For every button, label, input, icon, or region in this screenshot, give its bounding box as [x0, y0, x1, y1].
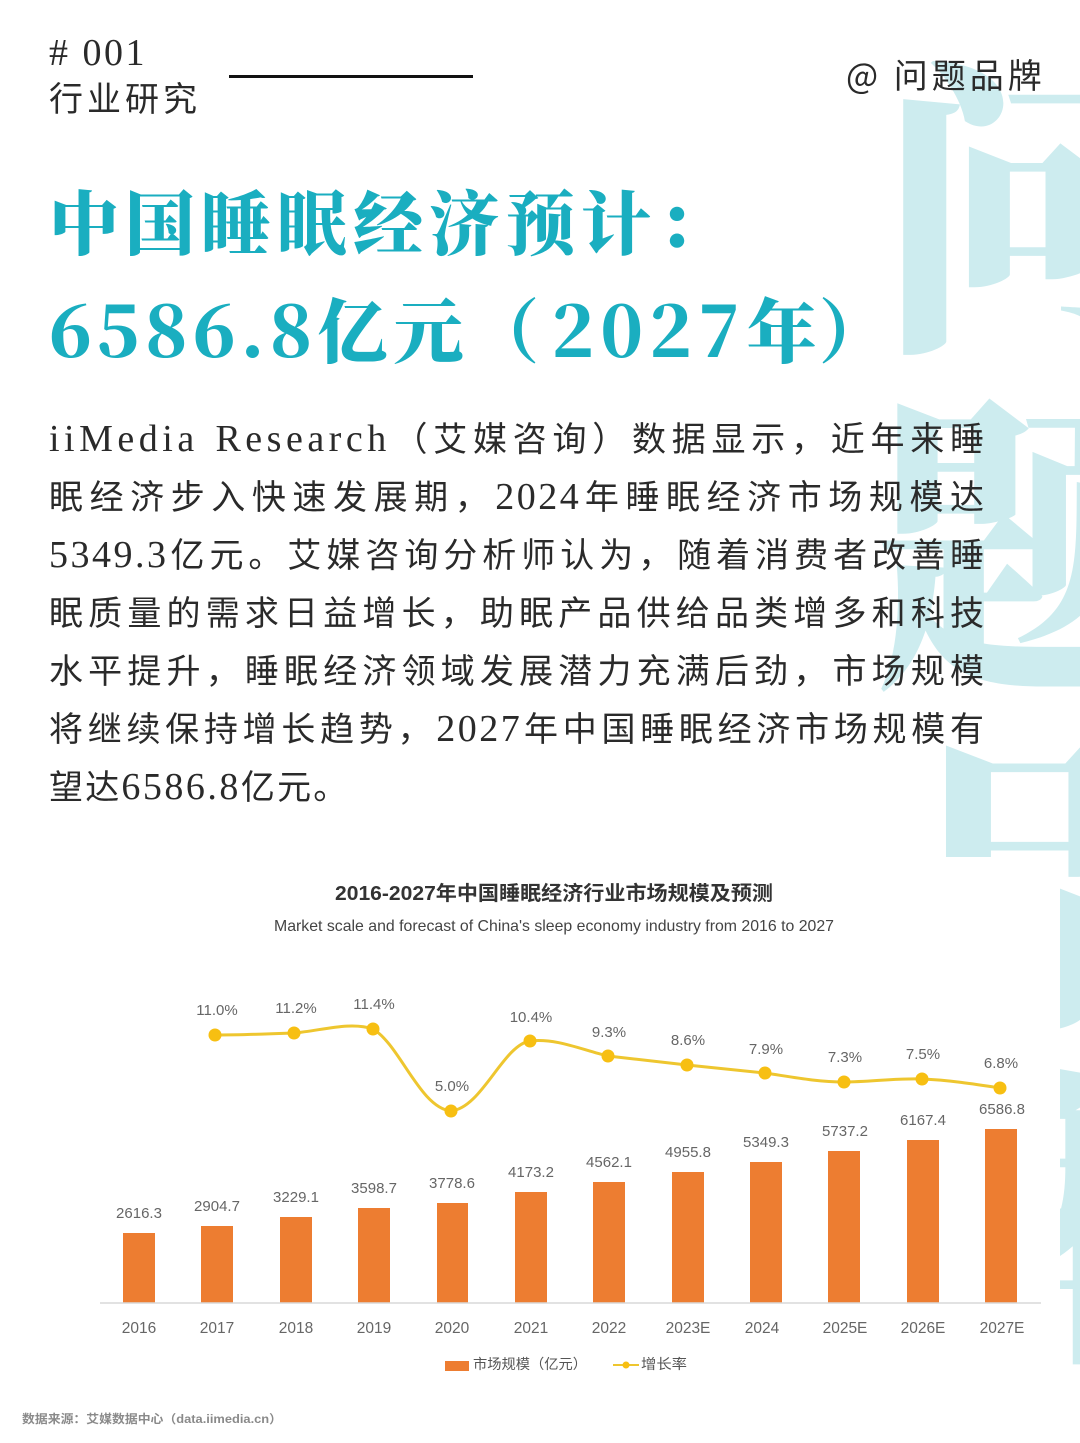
header rule: [229, 75, 473, 78]
bar value labels: 5349.3: [743, 1134, 789, 1151]
body paragraph: 眠经济步入快速发展期，2024年睡眠经济市场规模达: [49, 476, 987, 518]
body paragraph: 水平提升，睡眠经济领域发展潜力充满后劲，市场规模: [49, 654, 987, 691]
chart title: 2016-2027年中国睡眠经济行业市场规模及预测: [335, 881, 773, 905]
legend: [445, 1356, 687, 1372]
chart panel: [22, 881, 1041, 1426]
growth rate labels: 11.0%: [196, 1002, 238, 1019]
title: [49, 169, 895, 378]
category axis labels: 2025E: [823, 1320, 867, 1337]
growth rate labels: 7.5%: [906, 1046, 940, 1063]
bar value labels: 3229.1: [273, 1189, 319, 1206]
growth rate labels: 11.4%: [353, 996, 395, 1013]
bar chart: market size: [123, 1129, 1017, 1303]
brand tag: @ 问题品牌: [846, 49, 1046, 98]
growth rate labels: 5.0%: [435, 1078, 469, 1095]
category axis labels: 2017: [200, 1320, 234, 1337]
growth rate labels: 7.3%: [828, 1049, 862, 1066]
category axis labels: 2018: [279, 1320, 313, 1337]
bar value labels: 3598.7: [351, 1180, 397, 1197]
body paragraph: 5349.3亿元。艾媒咨询分析师认为，随着消费者改善睡: [49, 534, 987, 576]
title: 6586.8亿元（2027年）: [49, 277, 895, 378]
bar value labels: 4173.2: [508, 1164, 554, 1181]
growth rate labels: 7.9%: [749, 1041, 783, 1058]
bar value labels: 6167.4: [900, 1112, 946, 1129]
issue number and category: [49, 32, 201, 121]
issue number and category: 行业研究: [49, 72, 201, 121]
category axis labels: 2023E: [666, 1320, 710, 1337]
growth rate line: [208, 1022, 1006, 1118]
chart white backing: [0, 857, 1060, 1372]
title: 中国睡眠经济预计：: [49, 169, 733, 270]
bar value labels: 4955.8: [665, 1144, 711, 1161]
bar value labels: 2904.7: [194, 1198, 240, 1215]
category axis labels: 2019: [357, 1320, 391, 1337]
category axis labels: 2027E: [980, 1320, 1024, 1337]
bar value labels: 3778.6: [429, 1175, 475, 1192]
growth rate labels: 8.6%: [671, 1032, 705, 1049]
bar value labels: 4562.1: [586, 1154, 632, 1171]
body paragraph: [49, 418, 987, 808]
legend: 增长率: [641, 1356, 687, 1372]
category axis labels: 2022: [592, 1320, 626, 1337]
axis line: [100, 1302, 1041, 1304]
body paragraph: 眠质量的需求日益增长，助眠产品供给品类增多和科技: [49, 596, 987, 633]
category axis labels: 2016: [122, 1320, 156, 1337]
source note: 数据来源：艾媒数据中心（data.iimedia.cn）: [22, 1411, 282, 1426]
body paragraph: iiMedia Research（艾媒咨询）数据显示，近年来睡: [49, 418, 987, 460]
bar value labels: 5737.2: [822, 1123, 868, 1140]
category axis labels: [122, 1320, 1024, 1337]
chart title: Market scale and forecast of China's sleep economy industry from 2016 to 2027: [274, 918, 834, 935]
category axis labels: 2020: [435, 1320, 470, 1337]
category axis labels: 2026E: [901, 1320, 945, 1337]
growth rate labels: 10.4%: [510, 1009, 552, 1026]
body paragraph: 将继续保持增长趋势，2027年中国睡眠经济市场规模有: [49, 708, 987, 750]
growth rate labels: 6.8%: [984, 1055, 1018, 1072]
body paragraph: 望达6586.8亿元。: [49, 766, 350, 808]
category axis labels: 2021: [514, 1320, 548, 1337]
bar value labels: 2616.3: [116, 1205, 162, 1222]
issue number and category: # 001: [49, 32, 147, 74]
bar value labels: [116, 1101, 1025, 1222]
bar value labels: 6586.8: [979, 1101, 1025, 1118]
growth rate labels: 11.2%: [275, 1000, 317, 1017]
growth rate labels: 9.3%: [592, 1024, 626, 1041]
growth rate labels: [196, 996, 1018, 1095]
chart title: [274, 881, 834, 935]
legend: 市场规模（亿元）: [473, 1356, 587, 1372]
watermark: brand characters: [875, 0, 1080, 1372]
category axis labels: 2024: [745, 1320, 780, 1337]
